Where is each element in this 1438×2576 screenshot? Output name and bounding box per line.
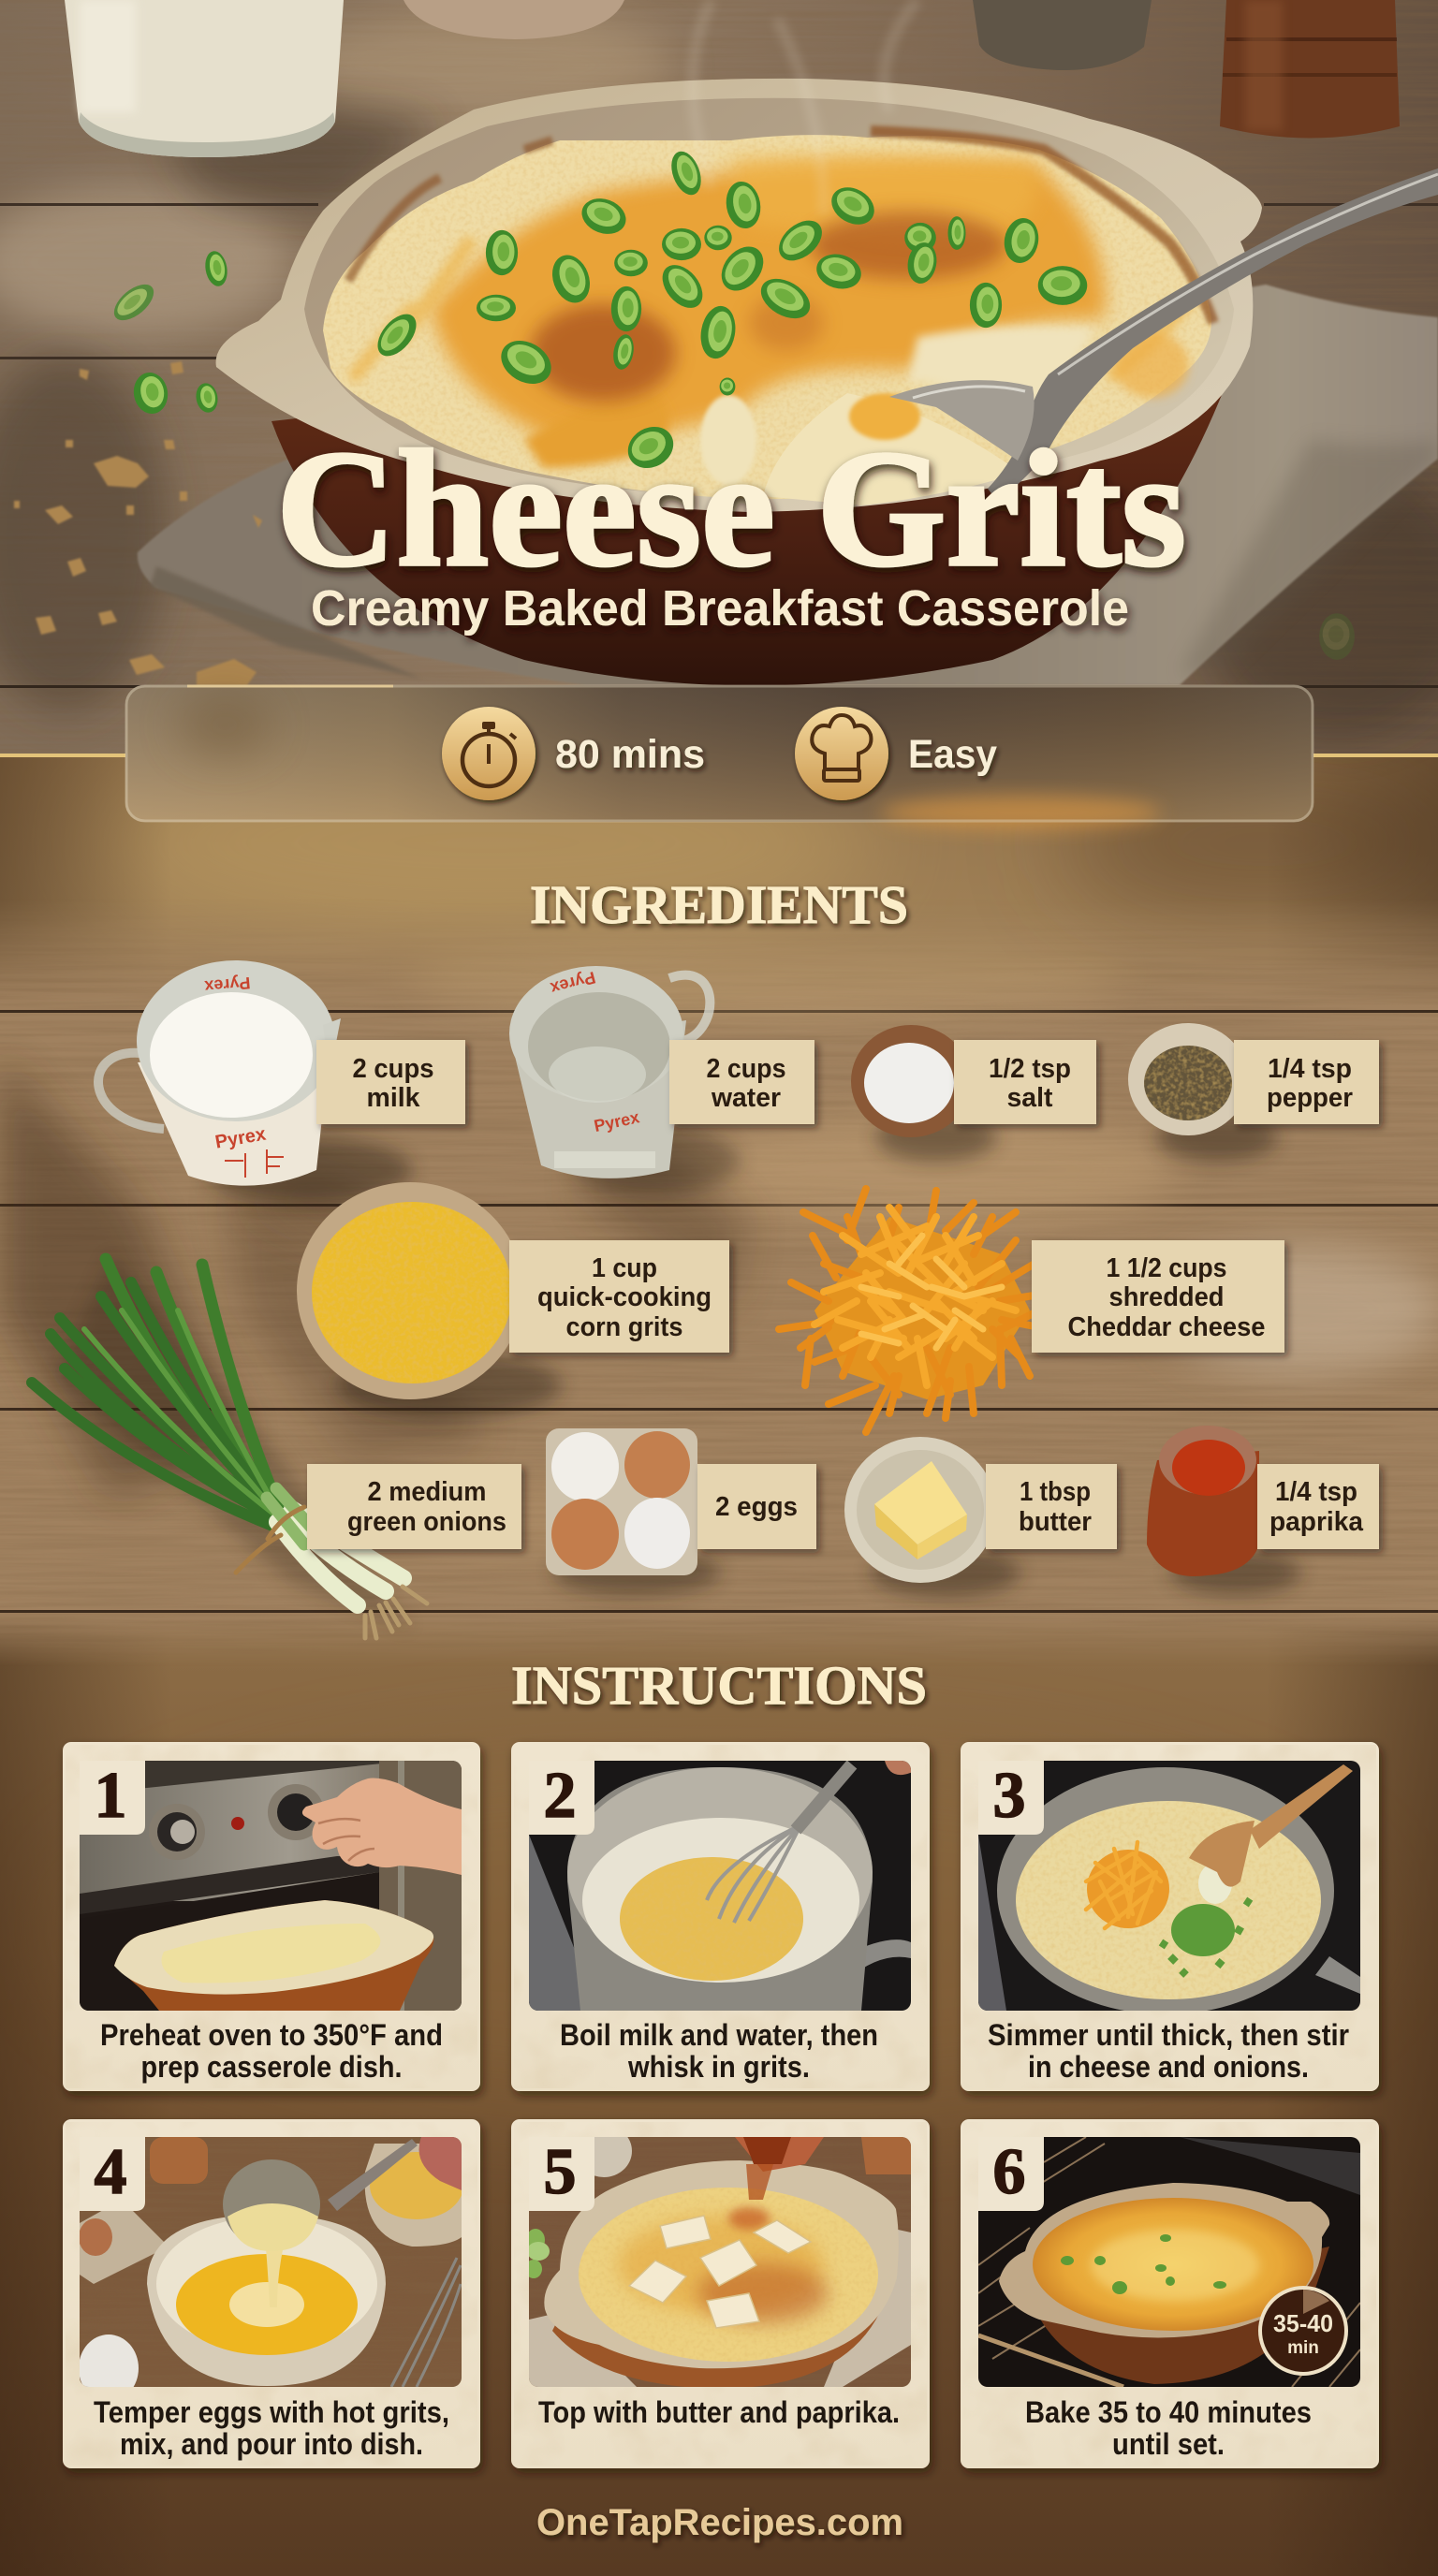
card (63, 1742, 480, 2091)
icon: green onion bunch (32, 1254, 427, 1638)
icon: salt bowl (851, 1025, 997, 1162)
footer brand: OneTapRecipes.com (536, 2502, 903, 2543)
step text: prep casserole dish. (140, 2050, 403, 2084)
label (986, 1464, 1117, 1549)
baked top (323, 135, 1211, 499)
label (1257, 1464, 1379, 1549)
label: pepper (1267, 1083, 1353, 1113)
card (511, 1742, 930, 2091)
number tab (978, 1760, 1044, 1835)
label: 2 eggs (715, 1492, 798, 1522)
panel: ingredient paprika (1147, 1426, 1379, 1595)
card (511, 2119, 930, 2468)
step text: Temper eggs with hot grits, (94, 2395, 449, 2429)
label: milk (367, 1083, 420, 1113)
icon: milk cup (98, 960, 412, 1204)
number tab: 4 (94, 2136, 127, 2208)
icon: milk cup: Pyrex (213, 1124, 268, 1153)
number tab: 6 (992, 2136, 1026, 2208)
label (307, 1464, 521, 1549)
panel: ingredient milk (98, 960, 465, 1204)
icon: grits bowl (297, 1182, 562, 1419)
label (1234, 1040, 1379, 1124)
label (1032, 1240, 1284, 1353)
panel: ingredients wood table (0, 899, 1438, 1666)
label: quick-cooking (537, 1282, 712, 1312)
glass panel (125, 685, 1313, 829)
label (697, 1464, 816, 1549)
Easy: Easy (908, 732, 997, 777)
label: shredded (1108, 1282, 1225, 1312)
wooden pepper mill (1220, 0, 1400, 139)
timer badge: 35-40 (1273, 2309, 1333, 2337)
label (954, 1040, 1096, 1124)
photo: pot with grits (529, 1761, 913, 2011)
label (509, 1240, 729, 1353)
pepper jar (973, 0, 1152, 70)
panel: step 5 (511, 2119, 930, 2468)
label: 1 tbsp (1020, 1477, 1091, 1507)
step text (988, 2018, 1349, 2084)
label (316, 1040, 465, 1124)
icon: egg carton (546, 1428, 721, 1595)
green onion garnish (370, 147, 1355, 660)
photo: pot with cheese and onions (978, 1761, 1360, 2014)
label: Cheddar cheese (1067, 1312, 1266, 1342)
icon: water cup: Pyrex (549, 968, 597, 998)
melted cheddar (356, 155, 1189, 468)
dish inner wall (304, 98, 1234, 498)
panel: ingredient water (509, 966, 814, 1194)
step text: Top with butter and paprika. (538, 2395, 900, 2429)
number tab (80, 2136, 145, 2211)
label: green onions (347, 1507, 506, 1537)
label: corn grits (565, 1312, 683, 1342)
panel: ingredient cheddar (779, 1189, 1284, 1432)
title: Cheese Grits (276, 416, 1186, 601)
icon: pepper bowl (1128, 1023, 1278, 1162)
icon: paprika jar (1147, 1426, 1301, 1595)
number tab: 2 (543, 1760, 577, 1832)
heading: instructions: INSTRUCTIONS (511, 1655, 927, 1716)
label: water (711, 1083, 781, 1113)
label: 1/4 tsp (1268, 1054, 1352, 1084)
gold divider (0, 754, 1438, 757)
panel: step 1 (63, 1742, 480, 2091)
icon: water cup: Pyrex (593, 1107, 641, 1135)
step text (100, 2018, 443, 2084)
panel: step 6 (961, 2119, 1379, 2468)
serving spoon (889, 168, 1438, 501)
icon: milk cup: Pyrex (204, 973, 251, 996)
photo: oven and dish (80, 1761, 462, 2011)
label: paprika (1269, 1507, 1364, 1537)
step text: Preheat oven to 350°F and (100, 2018, 443, 2052)
milk glass (65, 0, 440, 215)
number tab (529, 1760, 594, 1835)
80 mins: 80 mins (555, 732, 705, 777)
timer badge: min (1287, 2338, 1319, 2358)
label: 2 cups (706, 1054, 786, 1084)
hero photo (0, 0, 1438, 756)
number tab (80, 1760, 145, 1835)
label: 1/2 tsp (989, 1054, 1071, 1084)
casserole dish (216, 79, 1262, 685)
number tab: 5 (543, 2136, 577, 2208)
card (63, 2119, 480, 2468)
label: salt (1007, 1083, 1053, 1113)
step text: whisk in grits. (627, 2050, 810, 2084)
background bowl (404, 0, 624, 39)
panel: ingredient eggs (546, 1428, 816, 1595)
label: butter (1019, 1507, 1092, 1537)
panel: ingredient pepper (1128, 1023, 1379, 1162)
photo: butter and paprika topping (525, 2125, 911, 2389)
step text: Simmer until thick, then stir (988, 2018, 1349, 2052)
step text: in cheese and onions. (1028, 2050, 1309, 2084)
number tab: 3 (992, 1760, 1026, 1832)
panel: ingredient green onions (32, 1254, 521, 1638)
panel: step 4 (63, 2119, 480, 2468)
label: 1 1/2 cups (1107, 1253, 1226, 1283)
icon: butter plate (844, 1437, 1020, 1597)
label: 2 cups (352, 1054, 434, 1084)
icon: shredded cheddar (779, 1189, 1056, 1432)
label (669, 1040, 814, 1124)
hero wood table (0, 0, 1438, 756)
dish rim with handles (216, 79, 1262, 512)
step text: until set. (1112, 2427, 1225, 2461)
meta bar (125, 685, 1313, 829)
heading: ingredients: INGREDIENTS (530, 874, 908, 935)
icon: water cup (509, 966, 740, 1194)
icon: stopwatch (442, 707, 536, 800)
step text: Boil milk and water, then (560, 2018, 878, 2052)
photo: tempering eggs (79, 2137, 463, 2402)
step text: mix, and pour into dish. (120, 2427, 423, 2461)
scattered green onions and crumbs (14, 249, 262, 685)
napkin (138, 285, 1438, 685)
step text: Bake 35 to 40 minutes (1025, 2395, 1312, 2429)
photo: baked dish in oven (978, 2137, 1360, 2387)
panel: ingredient salt (851, 1025, 1096, 1162)
timer badge (1260, 2288, 1346, 2374)
scooped grits (700, 327, 1189, 505)
label: 1/4 tsp (1275, 1477, 1357, 1507)
panel: lower background (0, 739, 1438, 2576)
number tab: 1 (94, 1760, 127, 1832)
panel: step 2 (511, 1742, 930, 2091)
panel: ingredient butter (844, 1437, 1117, 1597)
panel: step 3 (961, 1742, 1379, 2091)
step text (560, 2018, 878, 2084)
icon: chef hat (795, 707, 888, 800)
number tab (529, 2136, 594, 2211)
subtitle: Creamy Baked Breakfast Casserole (311, 580, 1129, 637)
label: 2 medium (367, 1477, 487, 1507)
number tab (978, 2136, 1044, 2211)
card (961, 2119, 1379, 2468)
steam (693, 0, 917, 215)
dish body (271, 309, 1253, 685)
browned edges and paprika (348, 131, 1213, 402)
label: 1 cup (592, 1253, 657, 1283)
step text (1025, 2395, 1312, 2461)
panel: ingredient grits (297, 1182, 729, 1419)
card (961, 1742, 1379, 2091)
step text (94, 2395, 449, 2461)
